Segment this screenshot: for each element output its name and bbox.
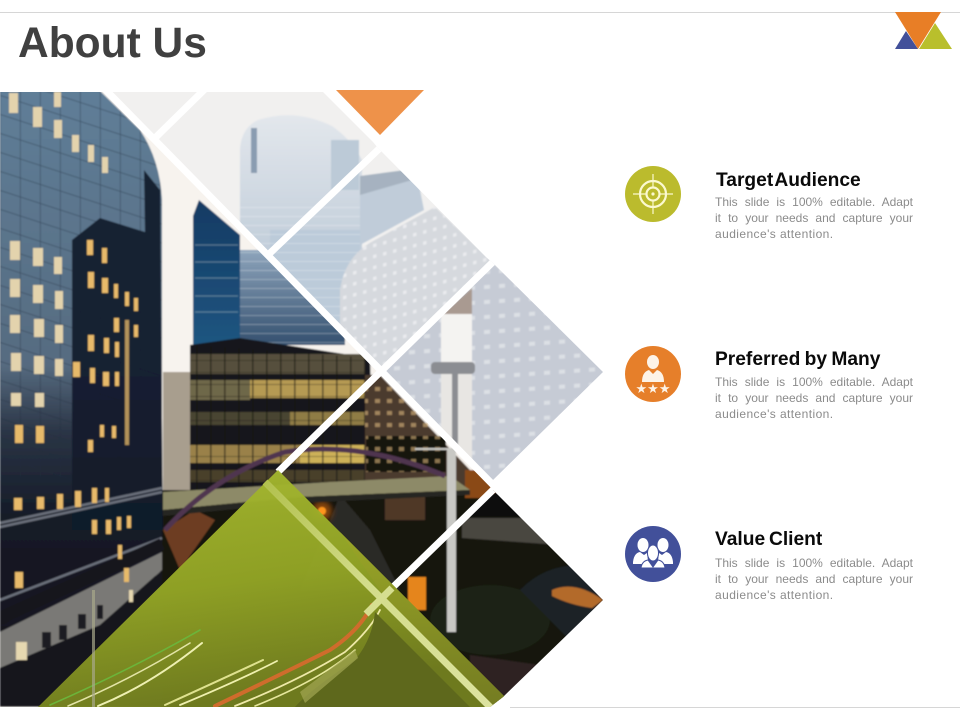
- text block: Value Client: This slide is 100% editable. Adapt: [715, 556, 913, 570]
- dark blue tower: [193, 200, 240, 345]
- text block: Preferred by Many: Preferred by Many: [715, 349, 880, 370]
- faded upper towers: [239, 114, 603, 480]
- text block: Target Audience: it to your needs and capture your: [715, 211, 913, 225]
- text block: Target Audience: audience's attention.: [715, 227, 834, 241]
- top rule: [0, 12, 960, 13]
- arch: [165, 449, 445, 530]
- icon: person with three stars: ★★★: [636, 382, 670, 397]
- mid glass block: [190, 338, 375, 500]
- text block: Value Client: it to your needs and capture your: [715, 572, 913, 586]
- light streaks on the road: [50, 605, 380, 706]
- pole seen through the triangle: [92, 590, 95, 707]
- ground: [160, 490, 620, 720]
- text block: Preferred by Many: This slide is 100% editable. Adapt: [715, 375, 913, 389]
- pole: [447, 450, 456, 632]
- text block: Value Client: Value Client: [715, 529, 822, 550]
- text block: Value Client: audience's attention.: [715, 588, 834, 602]
- icon: group of three people: [625, 526, 681, 582]
- pale side building: [163, 372, 193, 492]
- text block: Preferred by Many: [715, 349, 913, 421]
- walkway: [163, 476, 470, 510]
- bottom rule: [510, 707, 960, 708]
- icon: person with three stars: [625, 346, 681, 402]
- curved floor bands: [0, 488, 162, 600]
- text block: Target Audience: Target Audience: [716, 170, 861, 191]
- blue glass tower: [240, 250, 345, 345]
- pale road band: [300, 650, 358, 703]
- text block: Value Client: [715, 529, 913, 602]
- white diagonal dividers: [96, 80, 500, 590]
- icon: target: [625, 166, 681, 222]
- orange triangle accent: [336, 90, 424, 135]
- lit windows on left building: [9, 92, 108, 407]
- brown building: [364, 374, 470, 488]
- text block: Preferred by Many: it to your needs and capture your: [715, 391, 913, 405]
- title: About Us: [18, 20, 207, 67]
- text block: Target Audience: This slide is 100% editable. Adapt: [715, 195, 913, 209]
- text block: Target Audience: [715, 170, 913, 241]
- logo: three triangles: [895, 12, 952, 49]
- dark foliage at lower right of triangle: [295, 612, 470, 707]
- dark lower scene: [0, 84, 620, 720]
- pale stripes across the triangle: [265, 482, 492, 709]
- left curved glass building: [0, 84, 162, 707]
- diamond photo collage of city towers: [0, 80, 620, 720]
- reflection of dark tower: [72, 170, 163, 530]
- text block: Preferred by Many: audience's attention.: [715, 407, 834, 421]
- olive green translucent triangle: [38, 470, 515, 709]
